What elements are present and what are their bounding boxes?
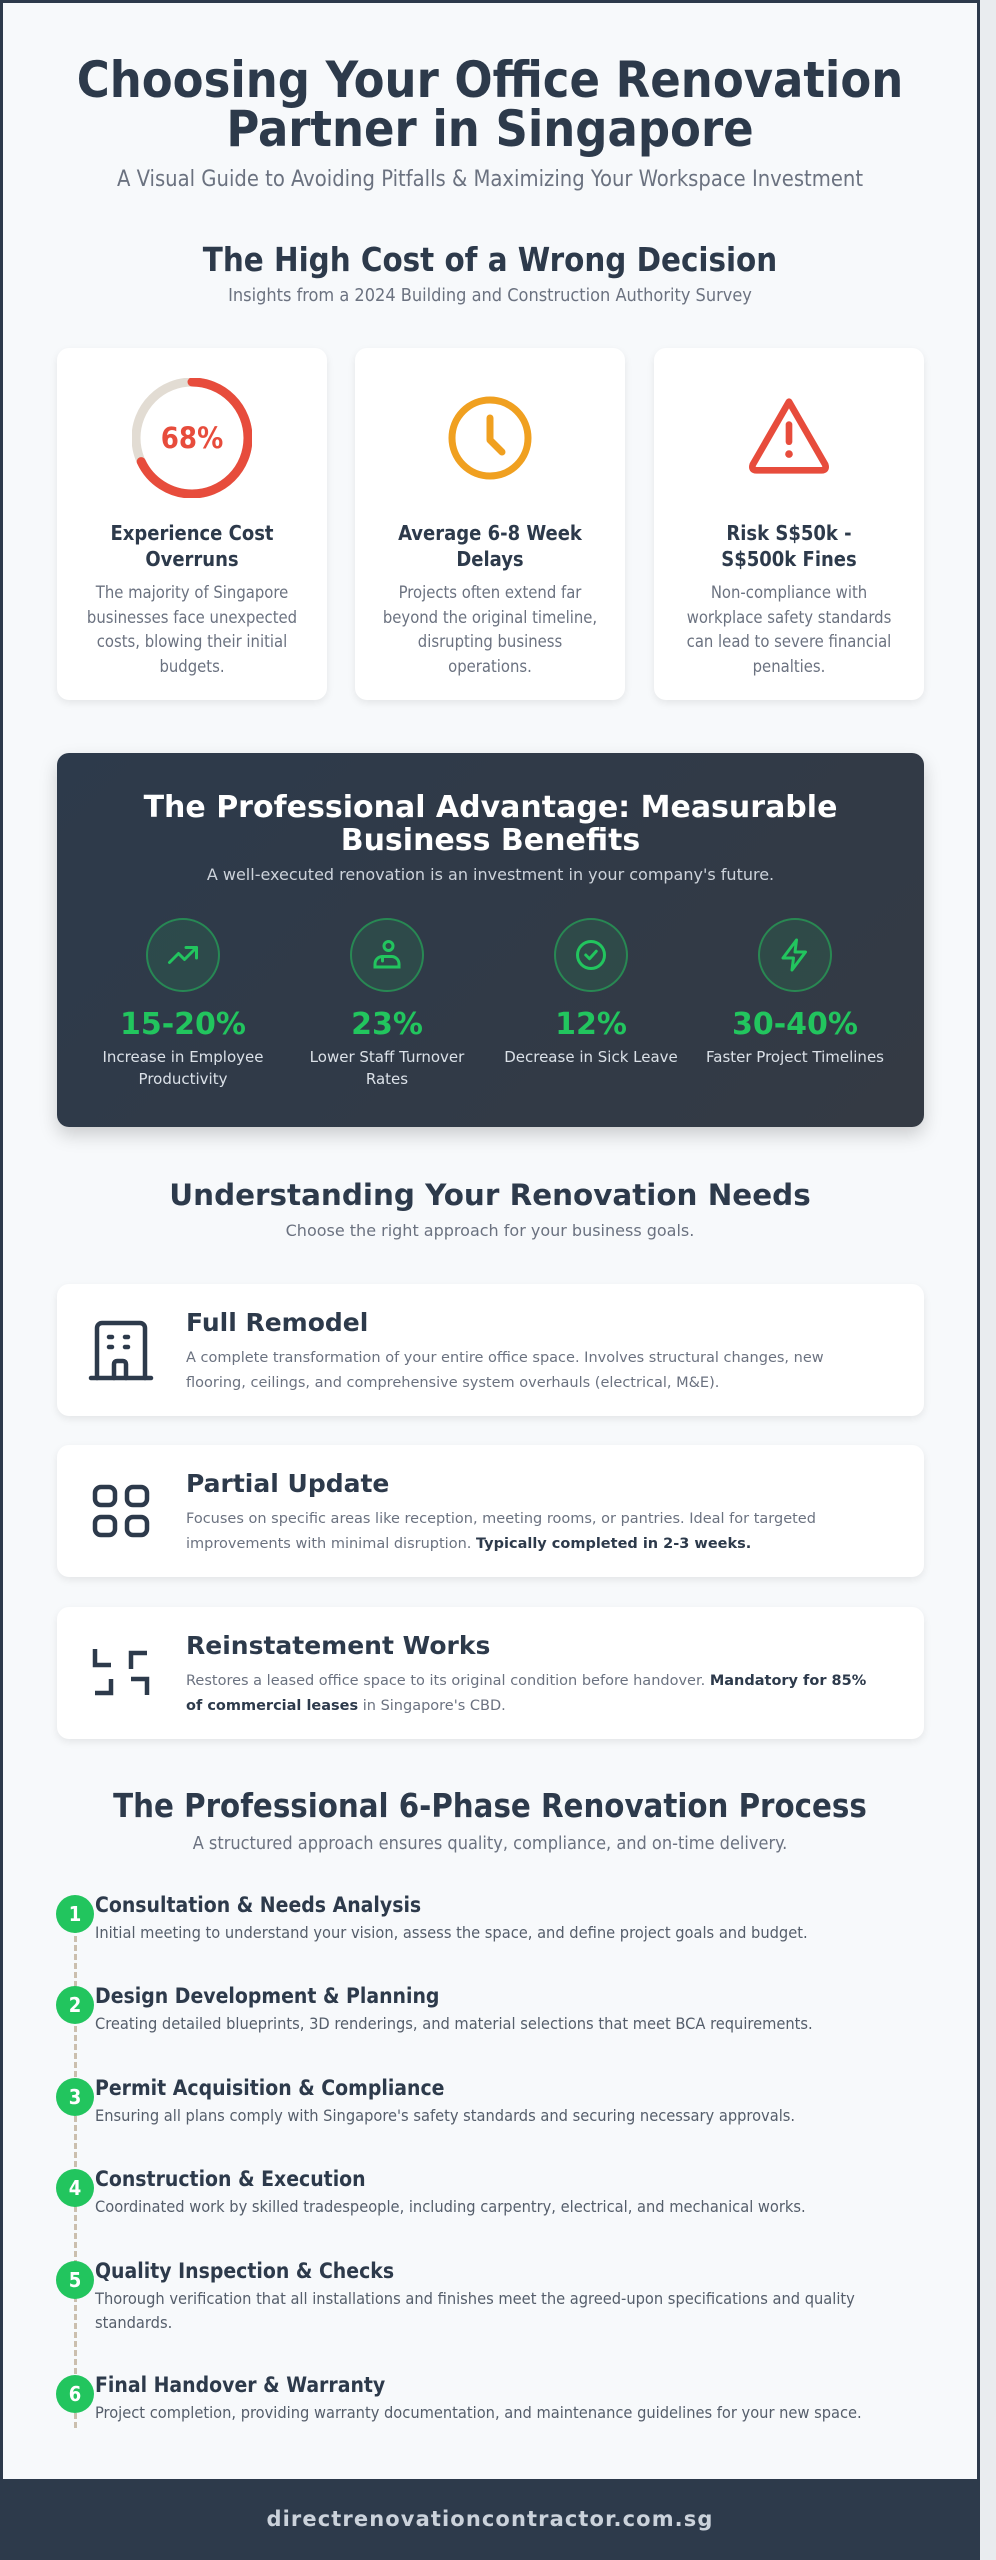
subheading: A structured approach ensures quality, compliance, and on-time delivery. [193,1833,787,1854]
heading: advantage [144,790,837,858]
icon: warning [749,398,829,474]
title [77,51,903,158]
text: 5 [69,2268,81,2292]
text: 4 [69,2176,81,2200]
stat: turnover: Rates [366,1070,408,1088]
title: Partner in Singapore [226,100,754,158]
card: cost overruns: Overruns [145,547,239,571]
icon: clock [448,396,532,480]
text: Creating detailed blueprints, 3D renderings, and material selections that meet BCA requirements. [95,2014,813,2033]
card: fines: Risk S$50k - [726,521,852,545]
text: Thorough verification that all installations and finishes meet the agreed-upon specifications and quality standards. [95,2289,855,2332]
option: partial update [57,1445,924,1577]
subtitle: A Visual Guide to Avoiding Pitfalls & Maximizing Your Workspace Investment [117,167,863,192]
stat: timelines [706,918,884,1066]
icon: grid [92,1484,150,1538]
text: Ensuring all plans comply with Singapore's safety standards and securing necessary approvals. [95,2106,795,2125]
heading: advantage: Business Benefits [341,823,640,858]
icon: building [88,1320,154,1380]
stat: timelines: 30-40% [732,1007,858,1042]
stat: sick leave: 12% [555,1007,627,1042]
step 6 [56,2373,862,2422]
text: Permit Acquisition & Compliance [95,2076,445,2100]
text: Project completion, providing warranty documentation, and maintenance guidelines for your new space. [95,2403,862,2422]
card: delays [355,348,625,700]
card: cost overruns [57,348,327,700]
step 4 [56,2167,806,2216]
icon: corners [92,1649,150,1696]
heading: high cost: The High Cost of a Wrong Decision [203,241,777,279]
option: partial update: Partial Update [186,1469,389,1498]
subheading: survey: Insights from a 2024 Building and Construction Authority Survey [228,285,752,306]
option: full remodel: A complete transformation of your entire office space. Involves structural changes, new flooring, ceilings, and comprehensive system overhauls (electrical, M&E). [186,1350,824,1391]
text: 6 [69,2382,81,2406]
footer: directrenovationcontractor.com.sg [266,2507,713,2531]
card: fines: Non-compliance with workplace safety standards can lead to severe financial penalties. [687,583,891,676]
heading: advantage: The Professional Advantage: Measurable [144,790,837,825]
text: Consultation & Needs Analysis [95,1893,421,1917]
text: 2 [69,1993,81,2017]
donut chart 68%: 68% [161,421,223,455]
card: cost overruns: The majority of Singapore businesses face unexpected costs, blowing their initial budgets. [87,583,297,676]
card: cost overruns: Experience Cost [110,521,274,545]
option: reinstatement: Reinstatement Works [186,1631,490,1660]
text: Final Handover & Warranty [95,2373,385,2397]
panel: professional advantage [57,753,924,1127]
stat: productivity: Increase in Employee [102,1048,263,1066]
card: fines [654,348,924,700]
option: reinstatement [57,1607,924,1739]
text: Coordinated work by skilled tradespeople, including carpentry, electrical, and mechanical works. [95,2197,806,2216]
subheading: Choose the right approach for your business goals. [286,1221,694,1240]
stat: productivity: 15-20% [120,1007,246,1042]
timeline dashed line [74,1900,77,2428]
step 5 [56,2259,855,2332]
stat: productivity [102,918,263,1088]
text: Design Development & Planning [95,1984,439,2008]
card: delays: Average 6-8 Week [398,521,582,545]
step 3 [56,2076,795,2125]
option: reinstatement: Restores a leased office space to its original condition before handover. Mandatory for 85% of commercial leases in Singapore's CBD. [186,1673,866,1714]
step 1 [56,1893,808,1942]
stat: turnover: 23% [351,1007,423,1042]
text: 3 [69,2085,81,2109]
card: delays: Projects often extend far beyond the original timeline, disrupting business operations. [383,583,597,676]
text: Construction & Execution [95,2167,366,2191]
text: Quality Inspection & Checks [95,2259,394,2283]
text: 1 [69,1902,81,1926]
stat: sick leave: Decrease in Sick Leave [504,1048,678,1066]
stat: turnover: Lower Staff Turnover [310,1048,464,1066]
card: fines: S$500k Fines [721,547,857,571]
donut chart 68% [132,378,252,498]
subheading: A well-executed renovation is an investment in your company's future. [207,865,774,884]
stat: turnover [310,918,464,1088]
footer [0,2479,980,2560]
heading: process: The Professional 6-Phase Renovation Process [113,1787,867,1825]
stat: timelines: Faster Project Timelines [706,1048,884,1066]
option: full remodel: Full Remodel [186,1308,368,1337]
stat: sick leave [504,918,678,1066]
step 2 [56,1984,813,2033]
option: partial update: Focuses on specific areas like reception, meeting rooms, or pantries. Ideal for targeted improvements with minimal disruption. Typically completed in 2-3 weeks. [186,1511,816,1552]
text: Initial meeting to understand your vision, assess the space, and define project goals and budget. [95,1923,808,1942]
option: full remodel [57,1284,924,1416]
stat: productivity: Productivity [139,1070,227,1088]
title: Choosing Your Office Renovation [77,51,903,109]
card: delays: Delays [456,547,524,571]
heading: renovation needs: Understanding Your Renovation Needs [169,1178,811,1212]
